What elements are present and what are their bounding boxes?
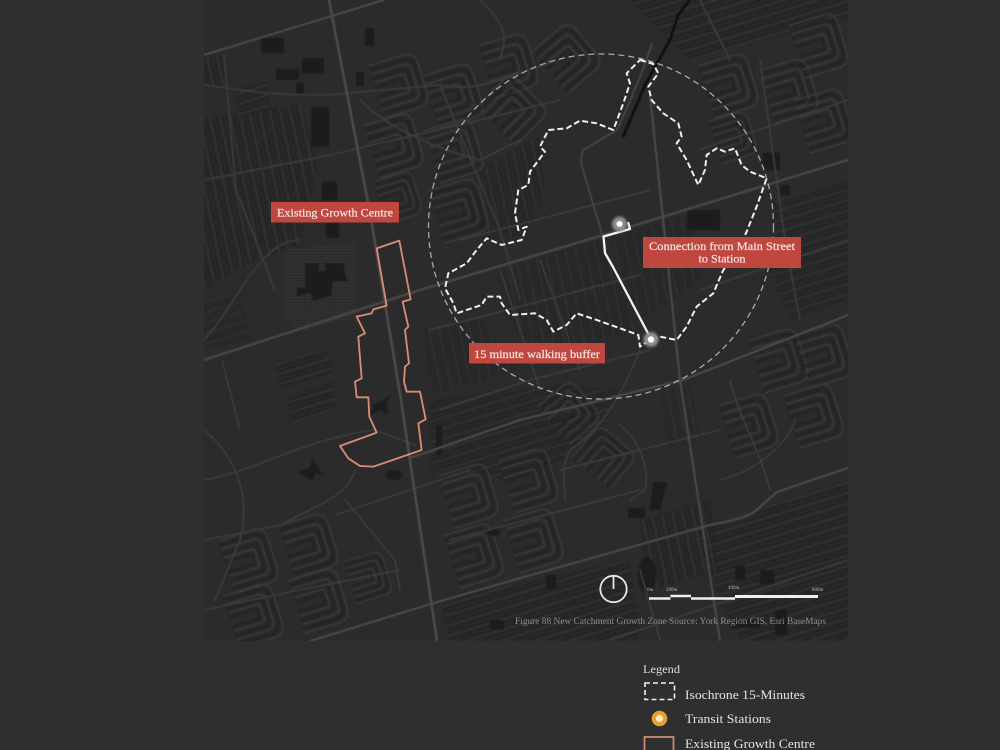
minor streets	[204, 0, 848, 640]
label: connection from main street to station	[643, 237, 801, 268]
buildings	[261, 28, 790, 635]
legend heading: Legend	[643, 662, 680, 676]
transit station: north	[612, 216, 627, 232]
map panel	[204, 0, 856, 648]
label: 15 minute walking buffer	[469, 343, 605, 364]
legend: transit text: Transit Stations	[685, 711, 771, 726]
stippled hospital grounds	[285, 240, 358, 330]
scale bar: 0m	[647, 588, 654, 593]
legend: transit station swatch	[652, 711, 667, 726]
main roads	[204, 0, 848, 641]
legend: isochrone swatch	[645, 683, 674, 700]
figure caption: Figure 88 New Catchment Growth Zone Source: York Region GIS, Esri BaseMaps	[515, 617, 826, 627]
walking catchment circle	[428, 54, 774, 399]
transit station: south	[644, 332, 658, 347]
label: existing growth centre	[271, 202, 399, 222]
label: connection from main street to station: to Station	[698, 252, 746, 266]
connection route from main street to station	[604, 222, 651, 339]
street base map	[204, 0, 856, 648]
label: connection from main street to station: Connection from Main Street	[649, 239, 796, 253]
scale bar: 800m	[812, 588, 824, 593]
curved subdivisions	[219, 12, 856, 648]
scale bar	[647, 586, 824, 598]
scale bar: 200m	[666, 588, 678, 593]
existing growth centre boundary	[340, 241, 426, 467]
label: existing growth centre: Existing Growth Centre	[277, 206, 393, 220]
isochrone 15-minute dashed outline	[445, 60, 767, 347]
residential grids	[204, 0, 848, 640]
icon: north arrow	[600, 576, 627, 602]
legend: growth centre swatch	[644, 737, 674, 750]
scale bar: 400m	[728, 586, 740, 591]
label: 15 minute walking buffer: 15 minute walking buffer	[474, 347, 600, 361]
icon: river	[623, 0, 690, 137]
legend: isochrone text: Isochrone 15-Minutes	[685, 687, 805, 702]
legend	[643, 662, 815, 750]
